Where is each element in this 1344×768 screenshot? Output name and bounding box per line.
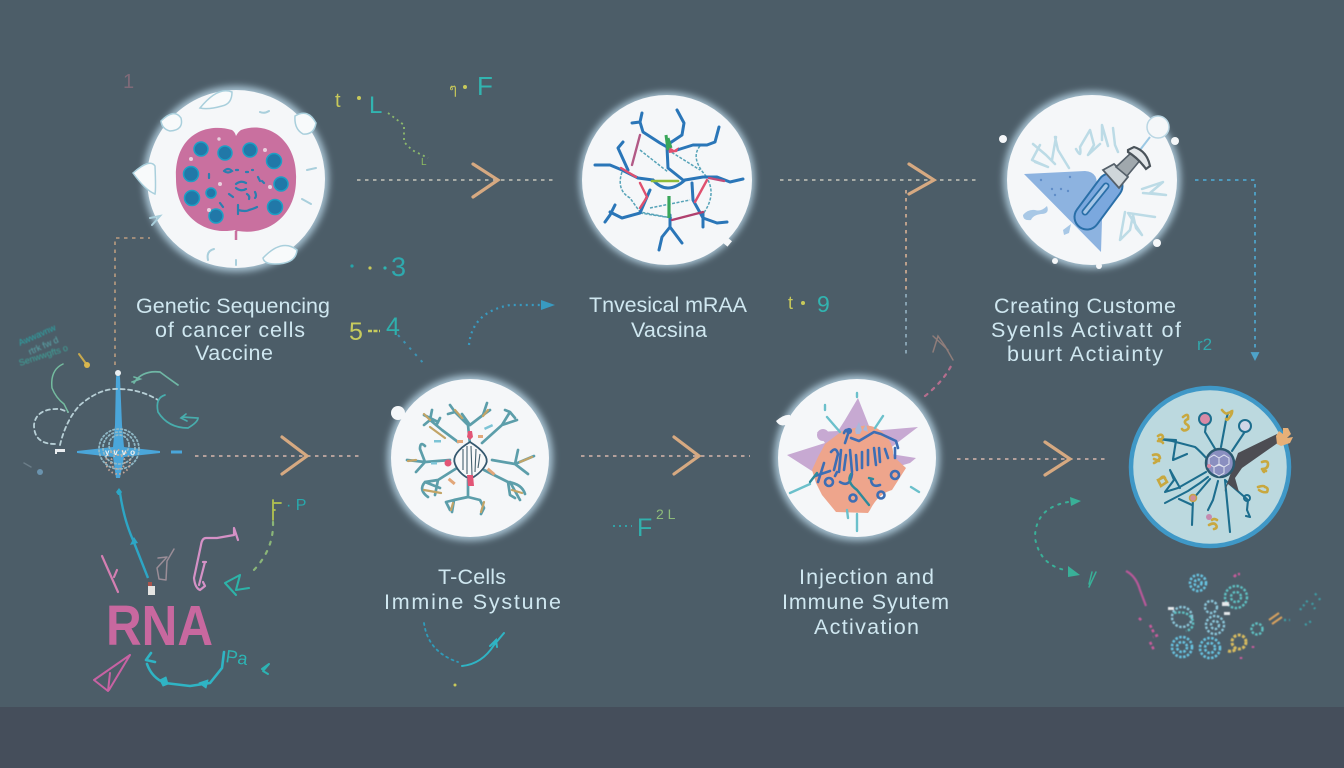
mark: t-9 — [788, 291, 830, 317]
label: T-cells: Immine Systune — [384, 590, 561, 614]
mark: t-L: L — [369, 92, 382, 119]
icon: cancer cell — [133, 86, 329, 272]
label: creating custom vaccine — [991, 294, 1181, 366]
mark: t-L: L — [421, 157, 427, 168]
icon: activated immune cell — [774, 375, 940, 541]
mark: t-9: 9 — [817, 291, 830, 317]
mark: t-L: t — [335, 90, 341, 112]
connector: mRNA vaccine to custom vaccine — [780, 164, 978, 355]
mark: t-9: t — [788, 293, 793, 313]
mark: 5-4: 5 — [349, 318, 363, 346]
dotted arc right of injection — [1035, 497, 1096, 587]
connector: custom vaccine down to tumour cell — [1195, 180, 1258, 359]
panel: creating custom vaccine — [991, 91, 1181, 366]
panel: genetic sequencing — [133, 86, 330, 365]
annotations: step marks — [123, 71, 1212, 686]
mark: F-L: 2 L — [656, 506, 676, 522]
label: genetic sequencing: of cancer cells — [155, 318, 305, 342]
RNA diagram — [17, 322, 306, 691]
icon: tumour cell under attack — [1131, 388, 1293, 546]
dotted arrow to mRNA vaccine — [469, 300, 555, 345]
mark: F-L — [613, 506, 676, 542]
arrow from injection up to custom vaccine — [925, 336, 953, 396]
panel: injection and immune activation — [774, 375, 949, 639]
mark: 5-4 — [349, 313, 425, 365]
RNA diagram: · P — [286, 497, 306, 514]
mark: F-L: F — [637, 514, 652, 542]
orbit arrows around crosshair — [24, 354, 198, 475]
label: injection and immune activation: Activation — [814, 615, 919, 639]
handwritten note — [17, 322, 69, 368]
mark: t-L — [335, 90, 428, 168]
mark: 3: 3 — [391, 252, 406, 282]
label: injection and immune activation: Immune Syutem — [782, 590, 949, 614]
panel: mRNA vaccine — [579, 92, 755, 342]
label: genetic sequencing: Genetic Sequencing — [136, 294, 330, 318]
label: injection and immune activation: Injection and — [799, 565, 934, 589]
label: creating custom vaccine: Syenls Activatt of — [991, 318, 1181, 342]
connector: RNA up to genetic sequencing — [115, 238, 150, 365]
icon: RNA crosshair: yvvo — [105, 448, 135, 457]
label: mRNA vaccine — [589, 293, 748, 342]
icon: mRNA network — [579, 92, 755, 268]
label: mRNA vaccine: Tnvesical mRAA — [589, 293, 748, 317]
label: creating custom vaccine: buurt Actiainty — [1007, 342, 1163, 366]
handwritten note: Senwwgfts o — [18, 343, 69, 368]
bottom band — [0, 707, 1344, 768]
mark: 5-4: 4 — [386, 313, 400, 341]
mark: r2: r2 — [1197, 335, 1212, 354]
connector: RNA to T-cells — [195, 437, 362, 474]
icon: immune cell cluster — [1126, 571, 1320, 659]
label: mRNA vaccine: Vacsina — [631, 318, 707, 342]
mark: g-F: ๆ — [449, 81, 457, 98]
label: injection and immune activation — [782, 565, 949, 639]
icon: RNA crosshair — [55, 370, 182, 595]
mark: g-F: F — [477, 71, 493, 101]
RNA sketch marks — [94, 500, 281, 691]
mark: 3 — [350, 252, 406, 282]
label: T-cells: T-Cells — [438, 565, 506, 589]
mark: g-F — [449, 71, 493, 101]
panel: T-cells — [384, 375, 561, 614]
label: T-cells — [384, 565, 561, 614]
label: genetic sequencing: Vaccine — [195, 341, 273, 365]
mark: 1: 1 — [123, 71, 134, 93]
label: creating custom vaccine: Creating Custome — [994, 294, 1176, 318]
icon: syringe vial — [999, 91, 1181, 269]
connector: T-cells to injection — [581, 437, 750, 474]
handwritten note: Awwavnw — [17, 322, 58, 348]
panel: immune activity result — [1126, 388, 1320, 659]
icon: T-cell — [387, 375, 553, 541]
connector: genetic sequencing to mRNA vaccine — [357, 164, 555, 197]
arc arrow under T-cells — [424, 623, 504, 686]
RNA diagram: Pa — [224, 646, 250, 669]
label: genetic sequencing — [136, 294, 330, 365]
handwritten note: rtrk fw d — [27, 335, 60, 357]
RNA heading: RNA — [106, 594, 213, 658]
connector: injection to immune activity — [957, 442, 1105, 475]
